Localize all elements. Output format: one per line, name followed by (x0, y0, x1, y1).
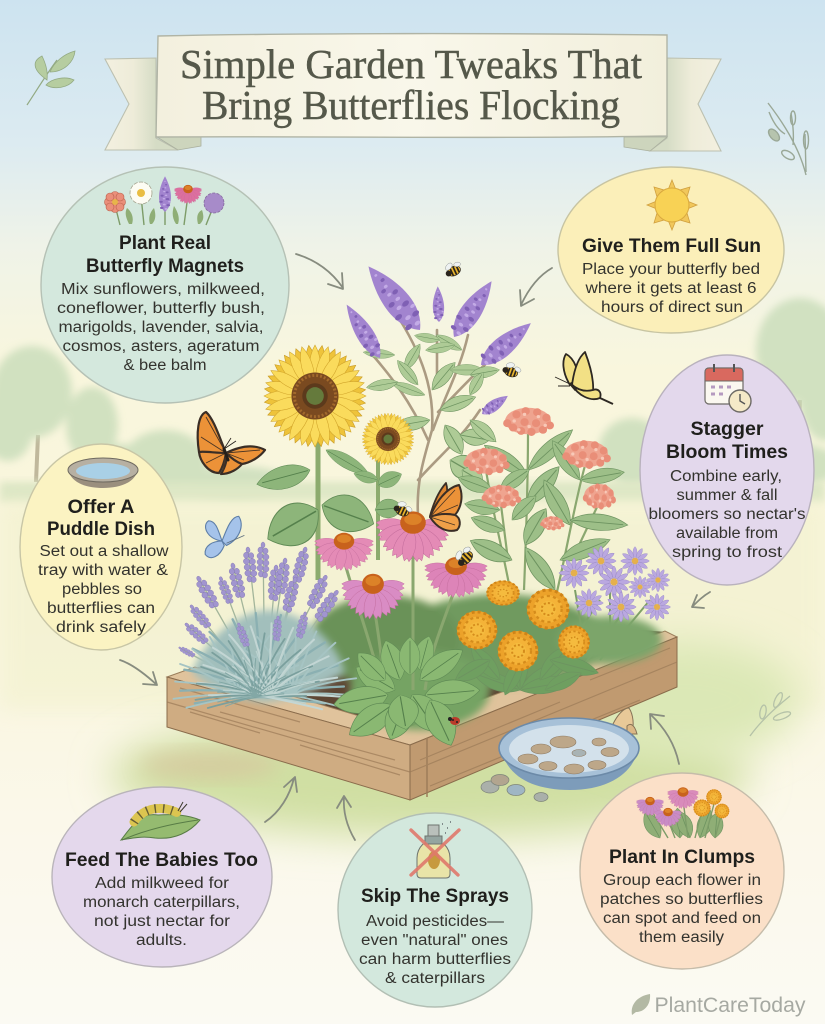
panel: feed the babies too (52, 787, 272, 967)
panel: plant real butterfly magnets (41, 167, 289, 403)
wood grain (167, 648, 677, 797)
title text: Simple Garden Tweaks That (180, 41, 643, 87)
body text: summer & fall (676, 487, 778, 504)
arrow: bloom times to asters (692, 592, 710, 608)
body text: Add milkweed for (95, 875, 229, 892)
body text: pebbles so (62, 581, 142, 598)
heading: Plant Real (119, 233, 211, 254)
arrow: feed the babies to bed (265, 777, 297, 822)
body text: Set out a shallow (40, 543, 169, 560)
panel: give them full sun (558, 167, 784, 333)
body text: cosmos, asters, ageratum (62, 338, 260, 355)
arrow: skip the sprays to bed (337, 796, 355, 840)
arrow: puddle dish to bed (120, 660, 157, 685)
banner tails (105, 58, 721, 151)
heading: Give Them Full Sun (582, 236, 761, 257)
body text (83, 875, 240, 949)
plant: asters (558, 546, 671, 670)
butterfly: blue (205, 516, 244, 558)
body text: tray with water & (38, 562, 169, 579)
sprig: top right (766, 103, 808, 175)
body text (359, 913, 511, 987)
body text: even "natural" ones (361, 932, 508, 949)
raised garden bed (167, 610, 677, 800)
body text: coneflower, butterfly bush, (57, 300, 265, 317)
left side boards (167, 677, 410, 800)
heading: Offer A (68, 497, 135, 518)
butterfly: small tan (613, 708, 637, 734)
panel: stagger bloom times: Bloom Times (666, 442, 788, 463)
plant: marigolds (451, 581, 600, 698)
plant: milkweed (456, 407, 629, 600)
body text: adults. (136, 932, 187, 949)
body text: can harm butterflies (359, 951, 511, 968)
body text: Avoid pesticides— (366, 913, 505, 930)
body text: hours of direct sun (601, 299, 743, 316)
body text: them easily (639, 929, 724, 946)
body text: marigolds, lavender, salvia, (58, 319, 264, 336)
plant: coneflowers (315, 511, 487, 690)
panel: skip the sprays (338, 813, 532, 1007)
body text: not just nectar for (94, 913, 230, 930)
icon: flower clump (636, 787, 729, 842)
body text: & caterpillars (385, 970, 485, 987)
plant: leafy front foliage (332, 634, 481, 751)
logo: PlantCareToday: PlantCareToday (654, 994, 806, 1017)
icon: caterpillar on leaf (121, 802, 200, 840)
body text: & bee balm (124, 357, 206, 374)
lavender spikes (177, 542, 343, 659)
ground pebbles (481, 774, 548, 802)
dish pebbles (518, 736, 619, 774)
bed top rim (167, 631, 677, 745)
body text (648, 468, 806, 561)
title banner (105, 34, 721, 151)
ground washes (0, 500, 825, 837)
body text: butterflies can (47, 600, 155, 617)
bush leaves (363, 331, 501, 489)
panel: offer a puddle dish: Puddle Dish (47, 519, 155, 540)
plant: sunflowers (243, 324, 424, 580)
body text: spring to frost (672, 544, 783, 561)
butterfly: monarch on coneflower (430, 483, 462, 531)
body text: bloomers so nectar's (648, 506, 806, 523)
milkweed flower clusters (463, 407, 616, 530)
butterfly: yellow swallowtail (555, 352, 613, 404)
plant: silver lavender (167, 542, 367, 711)
icon: dish (68, 458, 138, 488)
body text: available from (676, 525, 778, 542)
bees (392, 258, 523, 569)
body text: where it gets at least 6 (584, 280, 756, 297)
banner panel (156, 34, 667, 137)
bush flower spikes (339, 258, 537, 419)
icon: sun (647, 180, 697, 230)
icon: crossed-out spray bottle (411, 822, 459, 878)
heading: Skip The Sprays (361, 886, 509, 907)
plant: butterfly bush (339, 258, 537, 515)
arrows (120, 254, 710, 840)
heading: Feed The Babies Too (65, 850, 258, 871)
body text (57, 281, 265, 374)
body text: can spot and feed on (603, 910, 761, 927)
body text: monarch caterpillars, (83, 894, 240, 911)
panel: offer a puddle dish (20, 444, 182, 650)
icon: calendar and clock (705, 364, 751, 412)
bird bath puddle dish (499, 718, 639, 790)
sunflower leaves (254, 444, 405, 558)
body text: Mix sunflowers, milkweed, (61, 281, 265, 298)
sprig: top left (27, 51, 75, 105)
panel: plant real butterfly magnets: Butterfly Magnets (86, 256, 244, 277)
panel: stagger bloom times (640, 355, 814, 585)
title text: Bring Butterflies Flocking (202, 82, 620, 128)
body text: drink safely (56, 619, 146, 636)
right side boards (410, 637, 677, 800)
heading: Plant In Clumps (609, 847, 755, 868)
butterflies (198, 352, 637, 734)
body text: patches so butterflies (600, 891, 763, 908)
body text: Group each flower in (603, 872, 761, 889)
title text (180, 41, 643, 128)
butterfly: monarch left (198, 412, 265, 474)
arrow: magnets to garden (296, 254, 343, 289)
soil (195, 610, 665, 730)
heading: Stagger (690, 419, 764, 440)
arrow: clumps to bed (650, 714, 679, 764)
panel: plant in clumps (580, 773, 784, 969)
arrow: sun to garden (520, 268, 552, 306)
body text: Combine early, (670, 468, 782, 485)
body text (600, 872, 763, 946)
icon: ladybug (448, 717, 460, 725)
icon: flower row (104, 176, 224, 225)
body text: Place your butterfly bed (582, 261, 760, 278)
body text (38, 543, 169, 636)
sprig: lower right (750, 691, 791, 736)
background: trees and hills (0, 298, 825, 502)
foliage mass (310, 594, 605, 730)
body text (582, 261, 760, 316)
